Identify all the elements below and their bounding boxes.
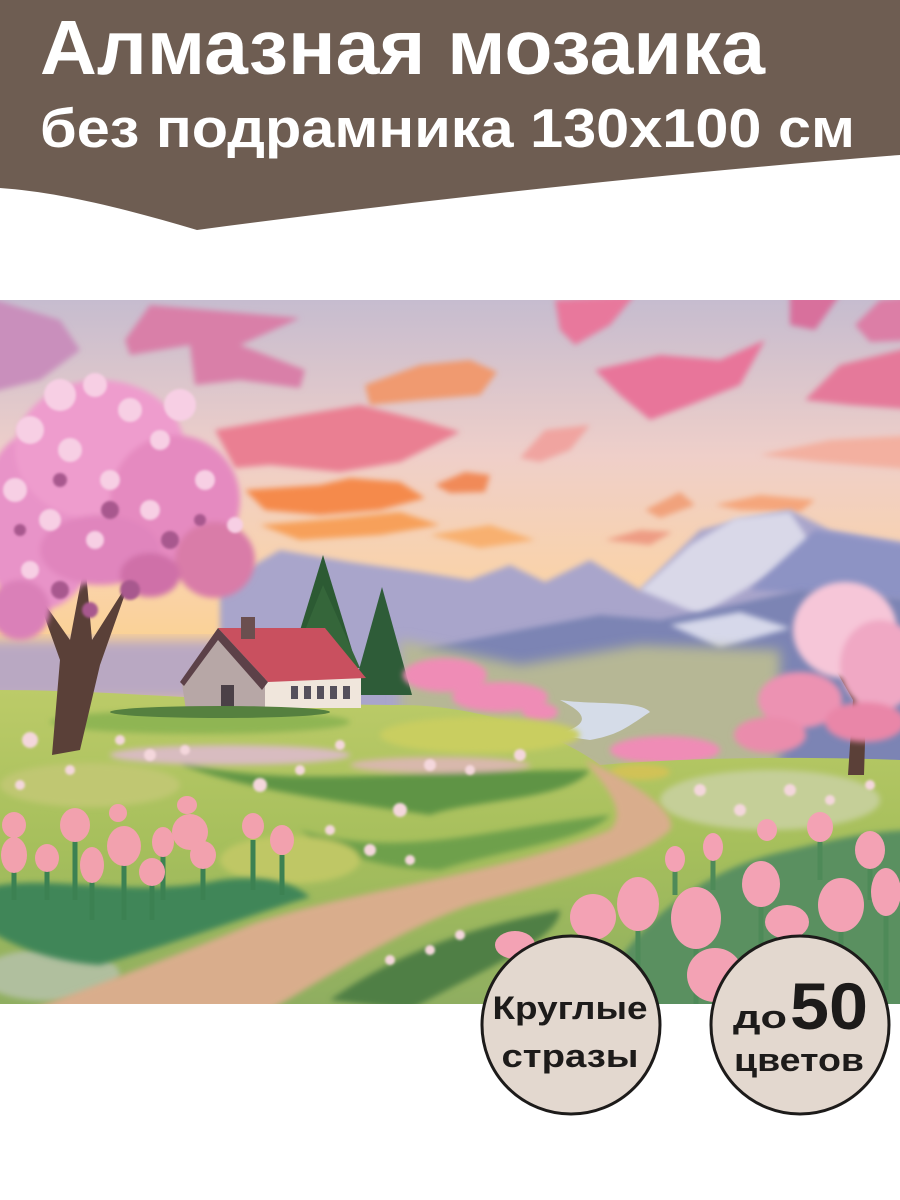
cottage: [110, 617, 366, 718]
badge: up to 50 colours: цветов: [734, 1042, 864, 1078]
painting: spring landscape: [0, 295, 900, 1010]
left cherry tree: [0, 373, 255, 755]
sky: [0, 300, 900, 697]
left tulips: [0, 796, 310, 965]
banner subtitle: без подрамника 130х100 см: [40, 97, 855, 159]
badge: round rhinestones: стразы: [502, 1038, 638, 1074]
river: [555, 700, 650, 740]
distant mountains: [0, 510, 900, 790]
badge: round rhinestones: Круглые: [492, 990, 648, 1026]
right cherry tree: [734, 582, 900, 775]
badge: up to 50 colours: [711, 936, 889, 1114]
path: [30, 760, 671, 1010]
clouds: [0, 295, 900, 548]
badge: up to 50 colours: до: [733, 999, 787, 1035]
meadow flowers: [15, 732, 875, 965]
badge: up to 50 colours: 50: [790, 969, 868, 1043]
badge: round rhinestones: [482, 936, 660, 1114]
meadow: [0, 690, 900, 1010]
banner title: Алмазная мозаика: [40, 5, 766, 91]
far trees and pink bushes: [290, 555, 720, 764]
right tulips: [495, 812, 900, 1010]
banner: [0, 0, 900, 230]
